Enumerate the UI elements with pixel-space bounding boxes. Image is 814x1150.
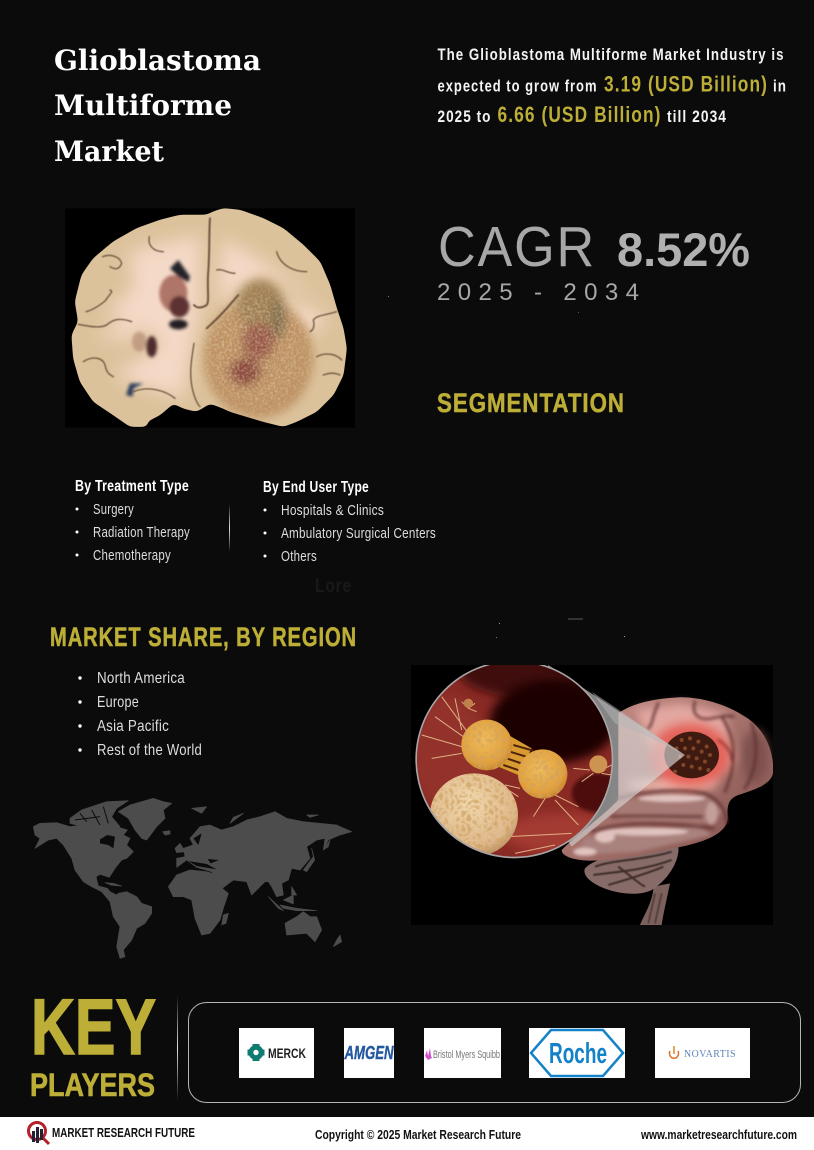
world map — [33, 798, 352, 958]
title — [54, 44, 261, 168]
cagr figure: 2025 - 2034 — [437, 279, 639, 306]
key players heading: PLAYERS — [30, 1067, 155, 1103]
footer: Copyright © 2025 Market Research Future — [315, 1127, 521, 1142]
brain silhouette — [72, 208, 347, 427]
faint placeholder text: Lore — [315, 576, 352, 597]
logo: amgen — [344, 1028, 394, 1078]
magnified cells circle — [415, 665, 614, 858]
by treatment type list — [75, 478, 190, 564]
cagr figure — [437, 215, 750, 306]
region list — [78, 670, 202, 759]
tumour — [650, 723, 730, 787]
by treatment type list: By Treatment Type — [75, 478, 189, 495]
cagr figure: CAGR — [438, 215, 596, 279]
market growth summary: 3.19 (USD Billion) — [604, 72, 768, 96]
footer — [0, 1117, 814, 1150]
market growth summary: 2025 to — [438, 107, 492, 126]
cell spikes — [422, 697, 615, 853]
left lesion — [126, 260, 190, 397]
market growth summary: in — [773, 76, 787, 96]
region list: North America — [97, 670, 185, 687]
by end user type list — [263, 479, 436, 565]
footer logo — [28, 1122, 49, 1144]
brain and cancer cells illustration — [411, 640, 773, 925]
cell bridges — [498, 735, 532, 775]
logo: bristol myers squibb: Bristol Myers Squibb — [433, 1049, 500, 1061]
title: Market — [54, 135, 164, 168]
by treatment type list: Surgery — [93, 501, 134, 518]
key players heading — [30, 982, 156, 1103]
cerebrum — [562, 697, 773, 861]
region list: Asia Pacific — [97, 718, 169, 735]
market share heading: MARKET SHARE, BY REGION — [50, 622, 357, 652]
by end user type list: Others — [281, 548, 317, 565]
logo: merck: MERCK — [268, 1045, 306, 1061]
by treatment type list: Radiation Therapy — [93, 524, 190, 541]
region list: Rest of the World — [97, 742, 202, 759]
key players heading: KEY — [31, 982, 156, 1071]
logo: amgen: AMGEN — [344, 1043, 394, 1063]
title: Glioblastoma — [54, 44, 261, 77]
market growth summary: expected to grow from — [438, 76, 598, 96]
key players panel — [188, 1002, 800, 1102]
by end user type list: By End User Type — [263, 479, 369, 496]
region list: Europe — [97, 694, 139, 711]
logo: bristol myers squibb — [424, 1028, 501, 1078]
logo: merck — [239, 1028, 314, 1078]
segmentation heading: SEGMENTATION — [437, 388, 625, 418]
by end user type list: Ambulatory Surgical Centers — [281, 525, 436, 542]
cerebellum — [584, 847, 678, 894]
market growth summary: 6.66 (USD Billion) — [498, 102, 662, 127]
orange cells — [461, 720, 512, 770]
title: Multiforme — [54, 89, 232, 122]
logo: novartis: NOVARTIS — [684, 1049, 736, 1060]
market growth summary — [438, 45, 787, 127]
tumour mass — [203, 280, 313, 418]
sulci — [78, 218, 342, 407]
magnifying cone — [548, 665, 685, 846]
market growth summary: till 2034 — [667, 107, 727, 126]
logo: roche: Roche — [549, 1038, 607, 1070]
footer: MARKET RESEARCH FUTURE — [52, 1125, 195, 1140]
brain section photo — [65, 208, 355, 432]
by treatment type list: Chemotherapy — [93, 547, 171, 564]
by end user type list: Hospitals & Clinics — [281, 502, 384, 519]
brain stem — [640, 883, 670, 925]
logo: novartis — [655, 1028, 750, 1078]
white matter — [93, 235, 327, 398]
logo: roche — [529, 1028, 625, 1078]
cagr figure: 8.52% — [617, 223, 750, 276]
